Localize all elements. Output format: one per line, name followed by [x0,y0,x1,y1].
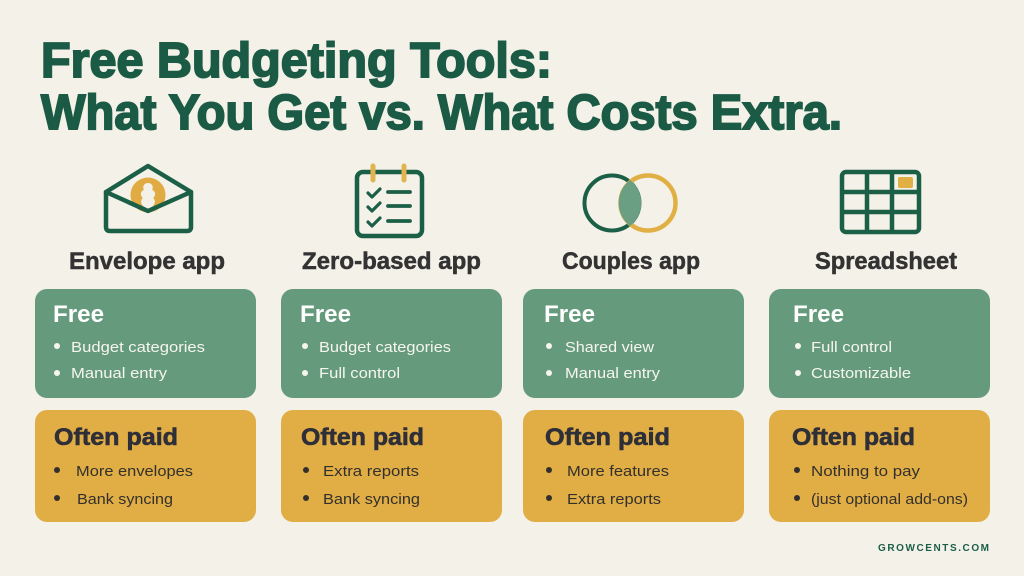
panel: often paid envelope: Bank syncing [77,491,173,508]
icon: overlapping circles [584,176,676,230]
panel: free envelope: Manual entry [71,365,168,382]
heading: couples app: Couples app [562,248,700,275]
title: What You Get vs. What Costs Extra. [41,86,842,140]
panel: free envelope [35,289,256,398]
panel: free spreadsheet: Free [793,301,844,328]
panel: free couples: Shared view [565,339,654,356]
column: couples app [523,176,744,522]
panel: often paid zero-based: Extra reports [323,463,419,480]
panel: free couples [523,289,744,398]
title [41,34,842,140]
panel: often paid couples [523,410,744,522]
icon: spreadsheet grid [842,172,919,232]
panel: often paid zero-based [281,410,502,522]
panel: free spreadsheet: Full control [811,339,892,356]
panel: often paid envelope [35,410,256,522]
panel: free couples: Free [544,301,595,328]
panel: often paid spreadsheet: Nothing to pay [811,463,921,480]
panel: often paid spreadsheet: (just optional add-ons) [811,491,968,508]
panel: free zero-based: Free [300,301,351,328]
panel: free envelope: Free [53,301,104,328]
icon: envelope with coin [106,166,191,231]
panel: free zero-based: Budget categories [319,339,451,356]
column: envelope app [35,166,256,522]
panel: free envelope: Budget categories [71,339,205,356]
panel: often paid couples: Often paid [545,424,670,451]
footer brand: GROWCENTS.COM [878,543,989,554]
panel: often paid couples: More features [567,463,669,480]
panel: free zero-based [281,289,502,398]
panel: free couples: Manual entry [565,365,661,382]
panel: often paid zero-based: Often paid [301,424,424,451]
panel: often paid envelope: More envelopes [76,463,193,480]
icon: checklist calendar [357,166,422,236]
heading: envelope app: Envelope app [69,248,225,275]
panel: often paid zero-based: Bank syncing [323,491,420,508]
title: Free Budgeting Tools: [41,34,552,88]
panel: often paid couples: Extra reports [567,491,661,508]
panel: often paid spreadsheet [769,410,990,522]
heading: spreadsheet: Spreadsheet [815,248,957,275]
heading: zero-based app: Zero-based app [302,248,481,275]
column: zero-based app [281,166,502,522]
panel: free spreadsheet [769,289,990,398]
panel: free spreadsheet: Customizable [811,365,911,382]
panel: often paid envelope: Often paid [54,424,178,451]
panel: free zero-based: Full control [319,365,400,382]
panel: often paid spreadsheet: Often paid [792,424,915,451]
column: spreadsheet [769,172,990,522]
